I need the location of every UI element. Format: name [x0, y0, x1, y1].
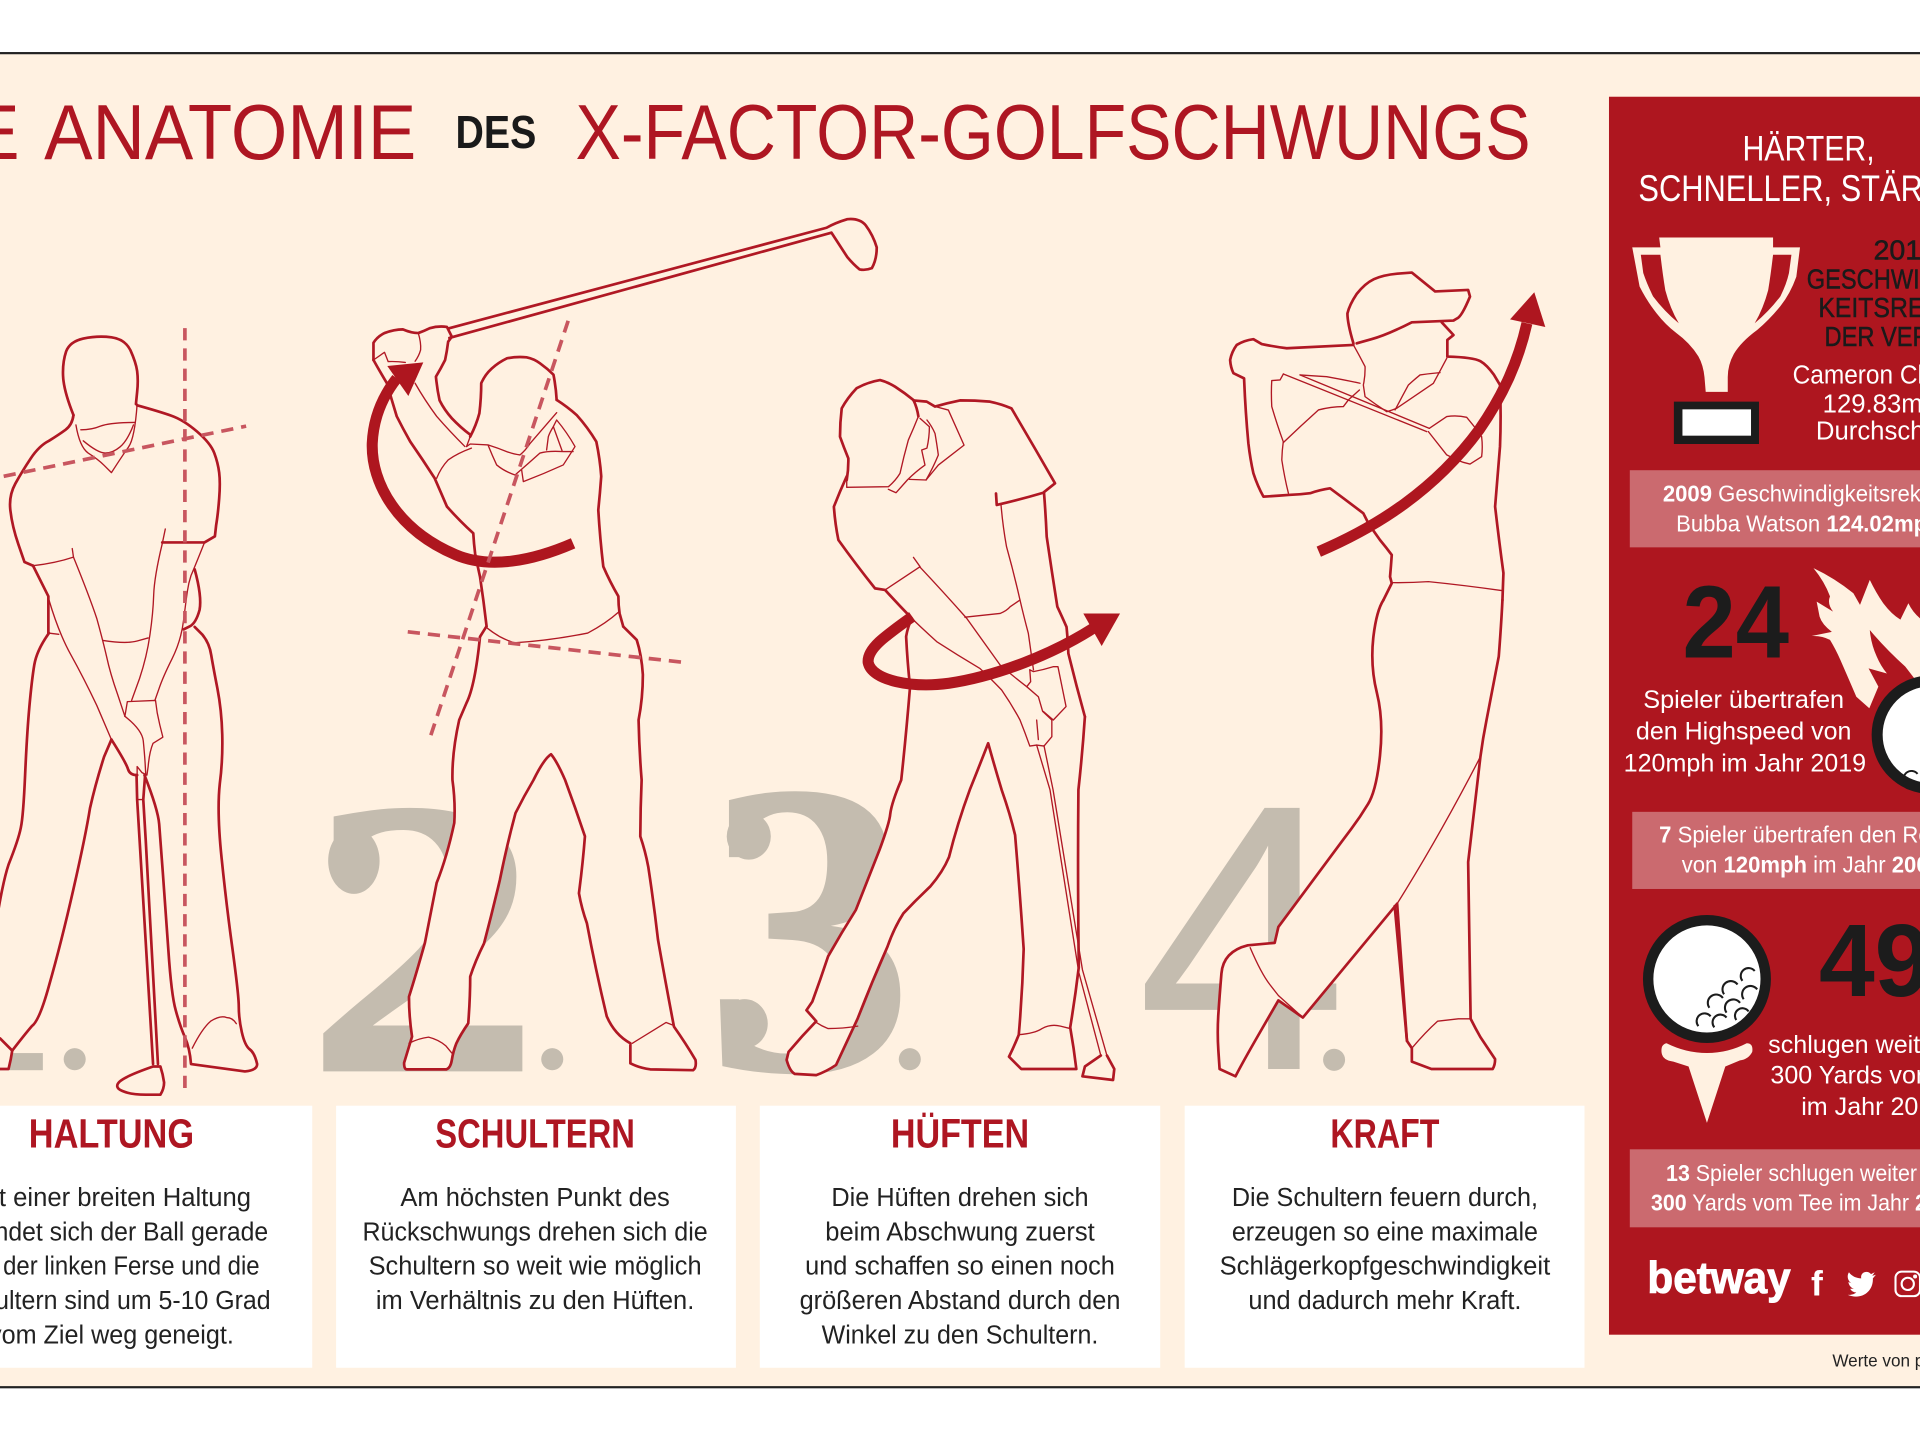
icon: flaming golf ball	[1812, 568, 1920, 789]
heading: Haltung: HALTUNG	[29, 1110, 194, 1156]
callout: 7 players	[1632, 812, 1920, 889]
step numbers	[0, 696, 1347, 1162]
figure 3: hips	[787, 380, 1120, 1080]
stat text: 24 players	[1624, 686, 1866, 777]
text: Hüften: beim Abschwung zuerst	[825, 1218, 1095, 1246]
panel: step 4 Kraft	[1185, 1106, 1584, 1368]
text: Schultern: Schultern so weit wie möglich	[369, 1253, 702, 1281]
text: Kraft: und dadurch mehr Kraft.	[1248, 1287, 1521, 1315]
text: Schultern	[362, 1184, 708, 1315]
icon: golf ball on tee	[1648, 920, 1766, 1123]
title: DES	[456, 106, 536, 158]
stat text: 24 players: den Highspeed von	[1636, 718, 1851, 746]
step numbers: 4	[1136, 726, 1347, 1150]
stat text: 24 players: Spieler übertrafen	[1643, 686, 1844, 714]
sidebar heading: HÄRTER,	[1742, 128, 1875, 168]
stat text: 49 players	[1768, 1031, 1920, 1121]
text: Kraft: erzeugen so eine maximale	[1232, 1218, 1538, 1246]
record holder text	[1793, 361, 1920, 446]
text: Schultern: Am höchsten Punkt des	[400, 1184, 670, 1212]
heading: Hüften: HÜFTEN	[891, 1110, 1029, 1156]
callout: 13 players	[1630, 1149, 1920, 1227]
figure 1 alignment lines	[4, 328, 246, 1093]
icon: instagram	[1896, 1272, 1920, 1296]
text: Kraft: Die Schultern feuern durch,	[1232, 1184, 1538, 1212]
title: ANATOMIE	[44, 88, 416, 176]
heading: Kraft: KRAFT	[1330, 1110, 1440, 1156]
text: Hüften: und schaffen so einen noch	[805, 1253, 1115, 1281]
icon: trophy	[1632, 238, 1800, 444]
text: Schultern: im Verhältnis zu den Hüften.	[376, 1287, 694, 1315]
text: Kraft: Schlägerkopfgeschwindigkeit	[1220, 1253, 1550, 1281]
text: Schultern: Rückschwungs drehen sich die	[362, 1218, 708, 1246]
step numbers: 3	[704, 696, 915, 1162]
step numbers: 2	[305, 720, 541, 1156]
panel: statistics sidebar	[1609, 97, 1920, 1335]
record heading	[1807, 235, 1920, 352]
figure 2 rotation lines	[408, 321, 684, 738]
sidebar heading	[1638, 128, 1920, 209]
text: Hüften: Winkel zu den Schultern.	[822, 1321, 1098, 1349]
heading: Schultern: SCHULTERN	[435, 1110, 635, 1156]
panel: step 3 Hüften	[760, 1106, 1160, 1368]
icon: facebook: f	[1811, 1264, 1823, 1304]
text: Kraft	[1220, 1184, 1550, 1315]
figure 2: shoulders	[372, 219, 877, 1070]
stat: 24 players: 24	[1682, 565, 1789, 680]
panel: step 2 Schultern	[336, 1106, 736, 1368]
stat text: 24 players: 120mph im Jahr 2019	[1624, 749, 1866, 777]
icon: twitter	[1848, 1272, 1876, 1297]
panel: step 1 Haltung	[0, 1106, 312, 1368]
text: Hüften	[800, 1184, 1120, 1349]
figure 1: stance	[0, 337, 257, 1095]
title: X-FACTOR-GOLFSCHWUNGS	[576, 88, 1531, 176]
logo: betway: betway	[1647, 1254, 1791, 1303]
text: Hüften: größeren Abstand durch den	[800, 1287, 1120, 1315]
title	[0, 88, 1531, 176]
text: Hüften: Die Hüften drehen sich	[831, 1184, 1089, 1212]
callout: 2009 speed record	[1630, 470, 1920, 547]
text: Haltung	[0, 1184, 271, 1349]
figure 4: power	[1218, 273, 1545, 1076]
